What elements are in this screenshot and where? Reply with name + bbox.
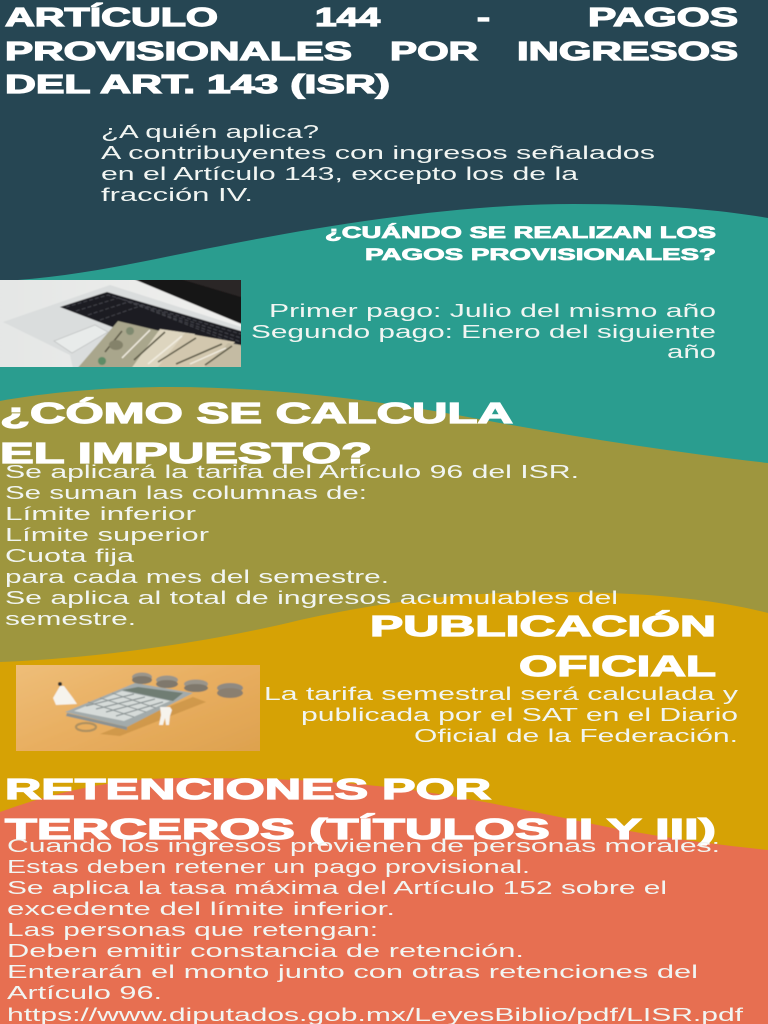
- photo: calculator and coins: [16, 665, 260, 751]
- heading: cómo se calcula: [0, 396, 513, 470]
- text block: cálculo: Cuota fija: [5, 546, 136, 566]
- text block: retenciones: Las personas que retengan:: [7, 920, 378, 940]
- text block: tarifa semestral: [264, 684, 738, 746]
- text block: retenciones: Estas deben retener un pago provisional.: [7, 857, 530, 877]
- text block: retenciones: [7, 836, 745, 1024]
- text block: cálculo: Se suman las columnas de:: [5, 483, 367, 503]
- text block: retenciones: excedente del límite inferior.: [7, 899, 395, 919]
- text block: retenciones: Deben emitir constancia de retención.: [7, 941, 524, 961]
- heading: cuándo se realizan: ¿CUÁNDO SE REALIZAN LOS: [325, 223, 716, 242]
- text block: cálculo: Límite inferior: [5, 504, 196, 524]
- text block: tarifa semestral: publicada por el SAT en el Diario: [301, 705, 738, 725]
- text block: a quién aplica: en el Artículo 143, excepto los de la: [101, 164, 580, 184]
- text block: tarifa semestral: La tarifa semestral será calculada y: [264, 684, 738, 704]
- text block: cálculo: Límite superior: [5, 525, 209, 545]
- title: -: [477, 2, 490, 32]
- heading: cuándo se realizan: PAGOS PROVISIONALES?: [365, 245, 716, 264]
- text block: retenciones: Artículo 96.: [7, 983, 162, 1003]
- title: [5, 2, 738, 99]
- heading: retenciones por terceros: TERCEROS (TÍTULOS II Y III): [5, 812, 716, 846]
- text block: fechas de pago: [251, 301, 716, 362]
- heading: publicación oficial: [370, 609, 716, 683]
- heading: cómo se calcula: ¿CÓMO SE CALCULA: [0, 396, 513, 430]
- title: PAGOS: [588, 2, 738, 32]
- text block: a quién aplica: [101, 122, 655, 205]
- title: DEL ART. 143 (ISR): [5, 69, 390, 99]
- heading: retenciones por terceros: RETENCIONES POR: [5, 774, 491, 806]
- text block: retenciones: Cuando los ingresos provienen de personas morales:: [7, 836, 720, 856]
- heading: cómo se calcula: EL IMPUESTO?: [0, 438, 372, 470]
- panel: olive wave: [0, 387, 768, 1024]
- text block: fechas de pago: Primer pago: Julio del mismo año: [269, 301, 716, 321]
- panel: yellow wave: [0, 592, 768, 1024]
- text block: a quién aplica: ¿A quién aplica?: [101, 122, 319, 142]
- photo: laptop with money: [0, 280, 241, 367]
- heading: publicación oficial: PUBLICACIÓN: [370, 609, 716, 643]
- text block: retenciones: Se aplica la tasa máxima del Artículo 152 sobre el: [7, 878, 667, 898]
- title: ARTÍCULO: [5, 2, 218, 32]
- heading: publicación oficial: OFICIAL: [519, 651, 716, 683]
- text block: cálculo: semestre.: [5, 609, 136, 629]
- text block: cálculo: para cada mes del semestre.: [5, 567, 389, 587]
- text block: fechas de pago: Segundo pago: Enero del siguiente: [251, 322, 716, 342]
- text block: fechas de pago: año: [667, 342, 716, 362]
- title: POR: [390, 36, 478, 66]
- text block: cálculo: [5, 462, 618, 629]
- text block: cálculo: Se aplica al total de ingresos acumulables del: [5, 588, 618, 608]
- heading: retenciones por terceros: [5, 774, 716, 846]
- panel: coral wave: [0, 778, 768, 1024]
- text block: a quién aplica: A contribuyentes con ingresos señalados: [101, 143, 655, 163]
- text block: a quién aplica: fracción IV.: [101, 185, 253, 205]
- text block: cálculo: Se aplicará la tarifa del Artículo 96 del ISR.: [5, 462, 579, 482]
- title: INGRESOS: [517, 36, 738, 66]
- text block: tarifa semestral: Oficial de la Federación.: [414, 726, 738, 746]
- heading: cuándo se realizan: [325, 223, 716, 264]
- title: PROVISIONALES: [5, 36, 352, 66]
- text block: retenciones: Enterarán el monto junto con otras retenciones del: [7, 962, 698, 982]
- title: 144: [315, 2, 381, 32]
